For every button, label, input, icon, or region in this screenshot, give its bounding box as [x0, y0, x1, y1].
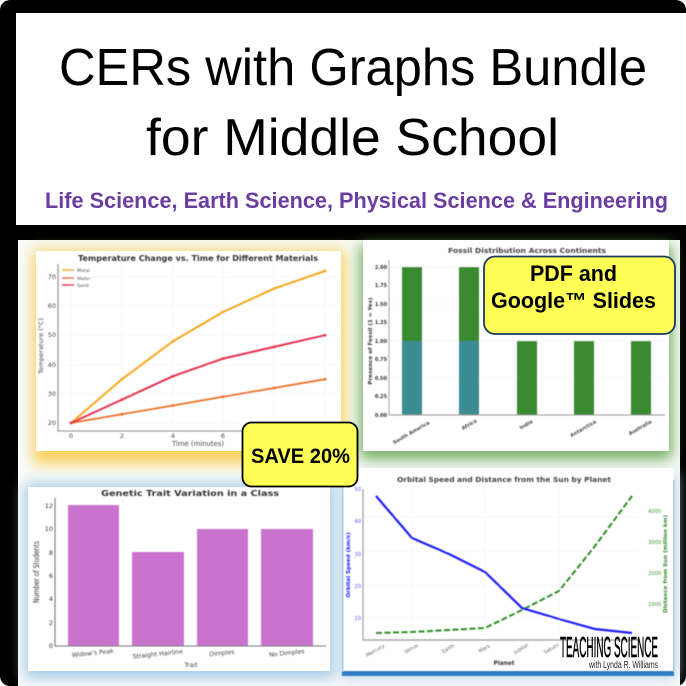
x axis labels: Mars: [478, 643, 492, 655]
y axis labels: 70: [48, 273, 56, 281]
logo: Teaching Science: [560, 632, 658, 671]
y axis labels: 60: [48, 302, 56, 310]
series: sand: [70, 334, 326, 424]
left axis title: Orbital Speed (km/s): [346, 532, 352, 598]
x axis labels: Mercury: [365, 643, 386, 659]
series: distance: [376, 496, 632, 633]
left axis labels: 10: [354, 616, 361, 622]
x axis labels: [72, 648, 305, 669]
x axis labels: 2: [120, 432, 124, 440]
right axis labels: 3000: [648, 540, 661, 546]
y axis labels: 40: [48, 361, 56, 369]
x axis labels: Earth: [441, 643, 456, 655]
y axis labels: 1.25: [375, 320, 388, 326]
subtitle: Life Science, Earth Science, Physical Science & Engineering: [45, 188, 668, 213]
chart title: Orbital Speed and Distance from the Sun by Planet: [397, 475, 611, 484]
chart title: Temperature Change vs. Time for Different Materials: [78, 253, 318, 263]
series: orbital speed: [376, 496, 632, 633]
y axis labels: 0.25: [375, 394, 388, 400]
callout: PDF and Google Slides: [484, 256, 675, 334]
y axis labels: [45, 502, 53, 650]
x axis labels: Africa: [461, 418, 478, 432]
x axis labels: No Dimples: [269, 648, 305, 659]
chart title: Genetic Trait Variation in a Class: [101, 488, 279, 498]
y axis labels: 0.00: [375, 413, 388, 419]
x axis labels: Venus: [403, 643, 420, 655]
x axis labels: 6: [221, 432, 225, 440]
y axis labels: 0.75: [375, 357, 388, 363]
legend: Sand: [77, 283, 89, 289]
series: water: [71, 378, 326, 423]
panel: genetic trait bar chart: [25, 484, 334, 678]
y axis labels: 30: [48, 390, 56, 398]
title: for Middle School: [146, 109, 559, 167]
y axis labels: 8: [49, 549, 53, 557]
y axis labels: 50: [48, 331, 56, 339]
y axis labels: 6: [49, 572, 53, 580]
x axis labels: [392, 418, 653, 446]
y axis labels: 10: [45, 525, 53, 533]
left axis labels: 50: [354, 487, 361, 493]
x axis labels: Straight Hairline: [132, 648, 184, 661]
x axis labels: 4: [171, 432, 175, 440]
series: metal: [71, 270, 326, 423]
y axis labels: 1.50: [375, 302, 388, 308]
title: CERs with Graphs Bundle: [59, 39, 647, 97]
y axis labels: 20: [48, 419, 56, 427]
panel: orbital speed line chart: Planet: [494, 661, 515, 667]
y axis labels: 12: [45, 502, 53, 510]
right axis labels: [648, 509, 661, 608]
x axis labels: [365, 642, 560, 659]
callout: PDF and Google Slides: PDF and: [530, 261, 617, 286]
x axis labels: Widow's Peak: [72, 648, 115, 659]
panel: orbital speed line chart: [340, 468, 676, 678]
panel: chart collage background: [18, 240, 680, 686]
x axis labels: Trait: [183, 662, 198, 669]
y axis labels: [375, 265, 388, 419]
bars: [402, 267, 651, 415]
x axis labels: [69, 432, 225, 448]
header panel: [16, 13, 686, 225]
y axis labels: 4: [49, 595, 53, 603]
callout: PDF and Google Slides: Google™ Slides: [491, 288, 656, 313]
left axis labels: 30: [354, 552, 361, 558]
right axis title: Distance from Sun (million km): [663, 515, 669, 613]
callout: save 20%: SAVE 20%: [251, 445, 350, 468]
y axis title: Number of Students: [32, 541, 41, 603]
left axis labels: [354, 487, 361, 622]
right axis labels: 2000: [648, 571, 661, 577]
left axis labels: 20: [354, 584, 361, 590]
legend: Metal: [77, 268, 90, 274]
y axis labels: 2.00: [375, 265, 388, 271]
panel: temperature line chart: [33, 250, 345, 464]
bars: [68, 505, 313, 646]
right axis labels: 4000: [648, 509, 661, 515]
x axis labels: India: [519, 419, 534, 431]
title: [59, 39, 647, 167]
x axis labels: Time (minutes): [171, 440, 224, 448]
y axis title: Presence of Fossil (1 = Yes): [368, 297, 374, 385]
legend: [62, 268, 91, 289]
y axis labels: 1.75: [375, 283, 388, 289]
x axis labels: Jupiter: [512, 642, 531, 656]
x axis labels: Antarctica: [569, 419, 598, 439]
x axis labels: 0: [69, 432, 73, 440]
y axis title: Temperature (°C): [37, 318, 45, 375]
y axis labels: 0: [49, 642, 53, 650]
legend: Water: [77, 276, 91, 282]
x axis labels: Dimples: [209, 649, 235, 658]
x axis labels: South America: [392, 420, 431, 446]
y axis labels: 2: [49, 619, 53, 627]
callout: save 20%: [242, 422, 358, 486]
right axis labels: 1000: [648, 602, 661, 608]
panel: fossil distribution bar chart: [360, 240, 672, 459]
y axis labels: [48, 273, 56, 427]
y axis labels: 1.00: [375, 339, 388, 345]
x axis labels: Saturn: [543, 642, 560, 656]
y axis labels: 0.50: [375, 376, 388, 382]
left axis labels: 40: [354, 519, 361, 525]
x axis labels: Australia: [628, 419, 653, 437]
chart title: Fossil Distribution Across Continents: [448, 247, 606, 255]
